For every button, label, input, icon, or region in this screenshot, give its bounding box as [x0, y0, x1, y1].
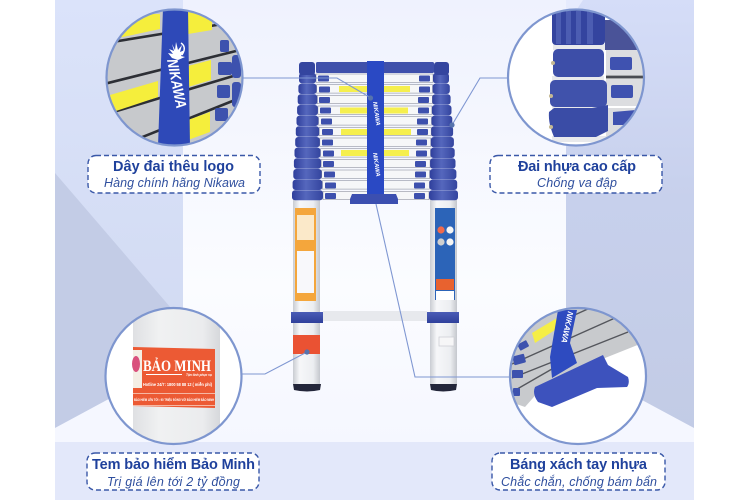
top ribbed cap — [552, 10, 605, 45]
rung tabs — [610, 57, 636, 125]
ladder top cap — [299, 62, 449, 75]
rung grooves — [512, 308, 628, 392]
blue strap with logos: NIKAWA — [371, 152, 380, 177]
detail circle: Bao Minh insurance sticker — [104, 306, 243, 446]
ladder bottom crossbar — [323, 311, 427, 321]
ladder right rail — [427, 197, 459, 392]
detail circle: Bao Minh insurance sticker: Tận tình phục vụ — [186, 372, 212, 377]
callout leader lines — [241, 78, 510, 377]
label: plastic bands: Đai nhựa cao cấp — [518, 159, 636, 175]
yellow warning stickers — [339, 86, 411, 156]
blue side tabs — [215, 40, 241, 121]
label: strap logo: Dây đai thêu logo — [113, 159, 234, 175]
blue strap with logos — [367, 61, 384, 194]
blue specification label — [435, 208, 455, 300]
label: insurance sticker: Tem bảo hiểm Bảo Minh — [92, 457, 255, 473]
yellow sticker — [532, 318, 558, 343]
blue strap with logos: NIKAWA — [371, 101, 380, 126]
detail circle: Bao Minh insurance sticker: BẢO MINH — [143, 356, 211, 375]
label: plastic bands — [490, 156, 662, 193]
palm logo mark — [168, 42, 185, 60]
small silver plate — [439, 337, 454, 346]
sticker — [133, 347, 215, 408]
rung end tabs — [318, 76, 430, 199]
detail circle: embroidered logo strap: NIKAWA — [163, 58, 189, 110]
detail circle: plastic hinge bands — [505, 5, 650, 150]
rung grooves — [108, 24, 236, 138]
detail circle: plastic carry handle: NIKAWA — [559, 311, 575, 344]
rungs — [316, 74, 433, 200]
left blue rung hinges — [292, 73, 323, 200]
hinge rivets — [549, 61, 555, 129]
yellow sticker patches — [110, 12, 212, 140]
detail circle: Bao Minh insurance sticker: BẢO HIỂM LÊN TỚI : 90 TRIỆU ĐỒNG VỚI BẢO HIỂM BẢO MINH — [134, 397, 215, 402]
ladder left rail — [291, 197, 323, 392]
label: insurance sticker — [87, 453, 259, 490]
detail circle: Bao Minh insurance sticker: Hotline 24/7: 1800 58 88 12 ( miễn phí) — [143, 382, 213, 387]
carry handle — [350, 194, 398, 204]
label: carry handle: Báng xách tay nhựa — [510, 457, 648, 473]
orange instruction label — [295, 208, 316, 301]
blue rung tabs — [512, 340, 529, 396]
strap — [550, 310, 577, 378]
label: carry handle: Chắc chắn, chống bám bẩn — [501, 474, 657, 489]
detail circle: plastic carry handle — [505, 305, 651, 450]
label: insurance sticker: Trị giá lên tới 2 tỷ đồng — [107, 475, 240, 489]
telescopic ladder — [291, 61, 459, 392]
label: strap logo — [88, 156, 260, 193]
red insurance sticker — [293, 335, 320, 354]
label: plastic bands: Chống va đập — [537, 176, 617, 190]
label: strap logo: Hàng chính hãng Nikawa — [104, 176, 245, 190]
strap — [158, 8, 190, 146]
handle — [534, 355, 629, 407]
detail circle: embroidered logo strap — [105, 8, 244, 147]
blue hinge bands — [553, 49, 604, 77]
right blue rung hinges — [429, 73, 458, 200]
label: carry handle — [492, 453, 665, 490]
